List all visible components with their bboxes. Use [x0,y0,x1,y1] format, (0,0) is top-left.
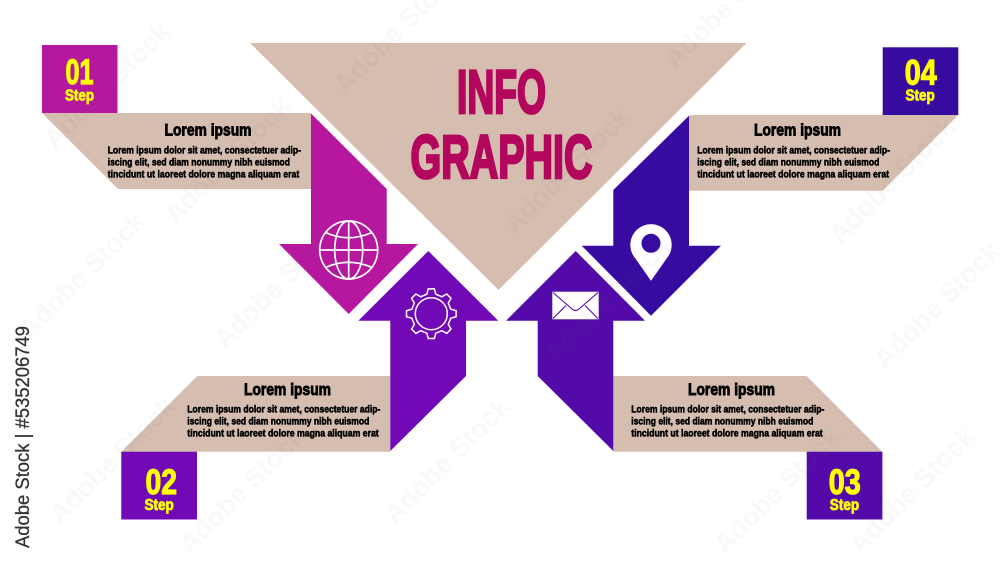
stock watermark: Adobe Stock [38,16,177,154]
arrow 04 [582,116,721,316]
arrow 01 [279,114,418,314]
step badge 02: 02 [146,463,177,502]
stock watermark: Adobe Stock [708,421,847,559]
body text 03: iscing elit, sed diam nonummy nibh euismod [631,417,813,428]
stock watermark: Adobe Stock [538,231,677,369]
heading 02: Lorem ipsum [244,380,331,399]
body text 02: iscing elit, sed diam nonummy nibh euismod [187,417,369,428]
title: INFO GRAPHIC: INFO [457,58,546,126]
step badge 02: Step [144,497,174,514]
step badge 01: Step [65,87,94,104]
text band 03 [613,376,882,452]
icon: location pin [630,224,672,281]
body text 04: Lorem ipsum dolor sit amet, consectetuer adip- [697,145,890,156]
title: INFO GRAPHIC: GRAPHIC [410,123,592,191]
stock watermark: Adobe Stock [378,391,517,529]
title panel: inverted triangle [250,43,746,290]
step badge 01 [42,45,118,113]
body text 03: tincidunt ut laoreet dolore magna aliquam erat [631,429,823,440]
text band 04 [689,115,958,191]
body text 04: iscing elit, sed diam nonummy nibh euismod [697,157,879,168]
panel: step 02 [121,251,498,520]
step badge 04: Step [906,87,935,104]
heading 01: Lorem ipsum [164,120,252,139]
step badge 04: 04 [905,53,937,92]
icon: gear [406,289,456,339]
step badge 03: 03 [829,463,861,502]
step badge 02 [121,452,197,520]
panel: step 01 [42,45,418,314]
step badge 03: Step [830,497,859,514]
body text 01: iscing elit, sed diam nonummy nibh euismod [108,157,290,168]
arrow 03 [506,251,645,451]
body text 04 [697,145,890,180]
icon: envelope [552,292,599,319]
body text 04: tincidunt ut laoreet dolore magna aliquam erat [697,169,889,180]
body text 01 [108,145,301,180]
stock watermark: Adobe Stock [498,101,637,239]
body text 02 [187,405,381,440]
icon: globe [320,221,378,279]
step badge 01: 01 [66,53,94,92]
stock watermark: Adobe Stock [208,216,347,354]
body text 02: Lorem ipsum dolor sit amet, consectetuer adip- [187,405,381,416]
panel: step 04 [582,47,958,316]
panel: step 03 [506,251,882,520]
text band 01 [42,113,311,189]
stock watermark: Adobe Stock [843,421,982,559]
body text 03: Lorem ipsum dolor sit amet, consectetuer adip- [631,405,825,416]
step badge 04 [883,47,958,115]
step badge 03 [807,452,882,520]
stock watermark: Adobe Stock [13,206,152,344]
vertical stock credit: Adobe Stock | #535206749 [13,326,34,548]
body text 01: Lorem ipsum dolor sit amet, consectetuer adip- [108,145,301,156]
body text 03 [631,405,825,440]
body text 01: tincidunt ut laoreet dolore magna aliquam erat [108,169,300,180]
stock watermark: Adobe Stock [158,91,297,229]
stock watermark: Adobe Stock [823,111,962,249]
heading 04: Lorem ipsum [754,120,841,139]
body text 02: tincidunt ut laoreet dolore magna aliquam erat [187,429,379,440]
text band 02 [121,376,390,452]
stock watermark: Adobe Stock [43,391,182,529]
heading 03: Lorem ipsum [688,380,775,399]
arrow 02 [358,251,498,451]
title: INFO GRAPHIC [410,58,592,191]
stock watermark: Adobe Stock [173,421,312,559]
